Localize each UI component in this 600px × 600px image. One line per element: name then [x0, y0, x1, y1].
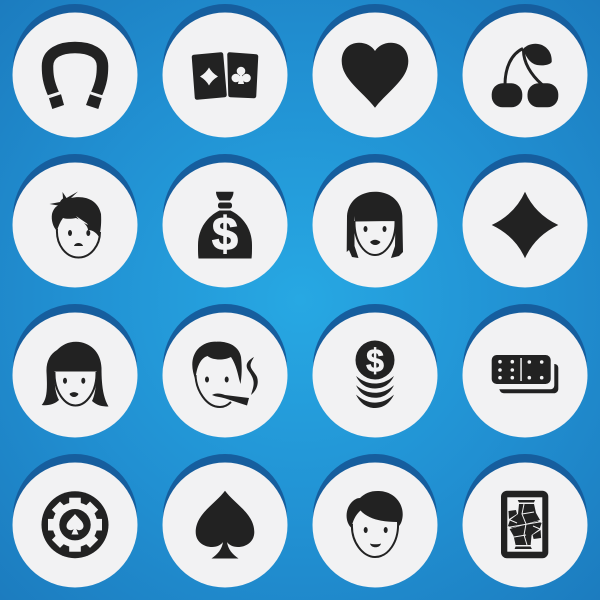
badge: spade: [162, 454, 288, 588]
icon: sad boy face: [50, 192, 101, 258]
badge: smoking man: [162, 304, 288, 438]
badge: woman with bob: [312, 154, 438, 288]
icon: king playing card: [501, 491, 548, 558]
badge: diamond: [462, 154, 588, 288]
icon: cherries: [492, 44, 558, 107]
icon: coin stack: $: [366, 342, 384, 378]
badge: king card: [462, 454, 588, 588]
badge: poker chip: [12, 454, 138, 588]
icon: money bag: $: [212, 207, 238, 260]
icon: woman with bob hair: [347, 192, 403, 258]
icon: woman with wavy hair: [42, 342, 109, 406]
icon: man smoking cigar: [192, 342, 258, 407]
icon: smiling boy face: [347, 491, 403, 557]
badge: dominoes: [462, 304, 588, 438]
badge: horseshoe: [12, 4, 138, 138]
icon: poker chip: [42, 491, 108, 558]
badge: sad boy: [12, 154, 138, 288]
icon: diamond suit: [492, 192, 558, 258]
badge: playing cards: [162, 4, 288, 138]
icon: two cards: [194, 54, 256, 98]
icon: heart: [342, 43, 408, 108]
icon: domino tiles: [492, 355, 558, 393]
badge: cherries: [462, 4, 588, 138]
icon: spade suit: [196, 491, 254, 558]
badge: smiling boy: [312, 454, 438, 588]
badge: coin stack: [312, 304, 438, 438]
badge: money bag: [162, 154, 288, 288]
icon: horseshoe: [47, 48, 103, 109]
badge: heart: [312, 4, 438, 138]
badge: woman with long hair: [12, 304, 138, 438]
